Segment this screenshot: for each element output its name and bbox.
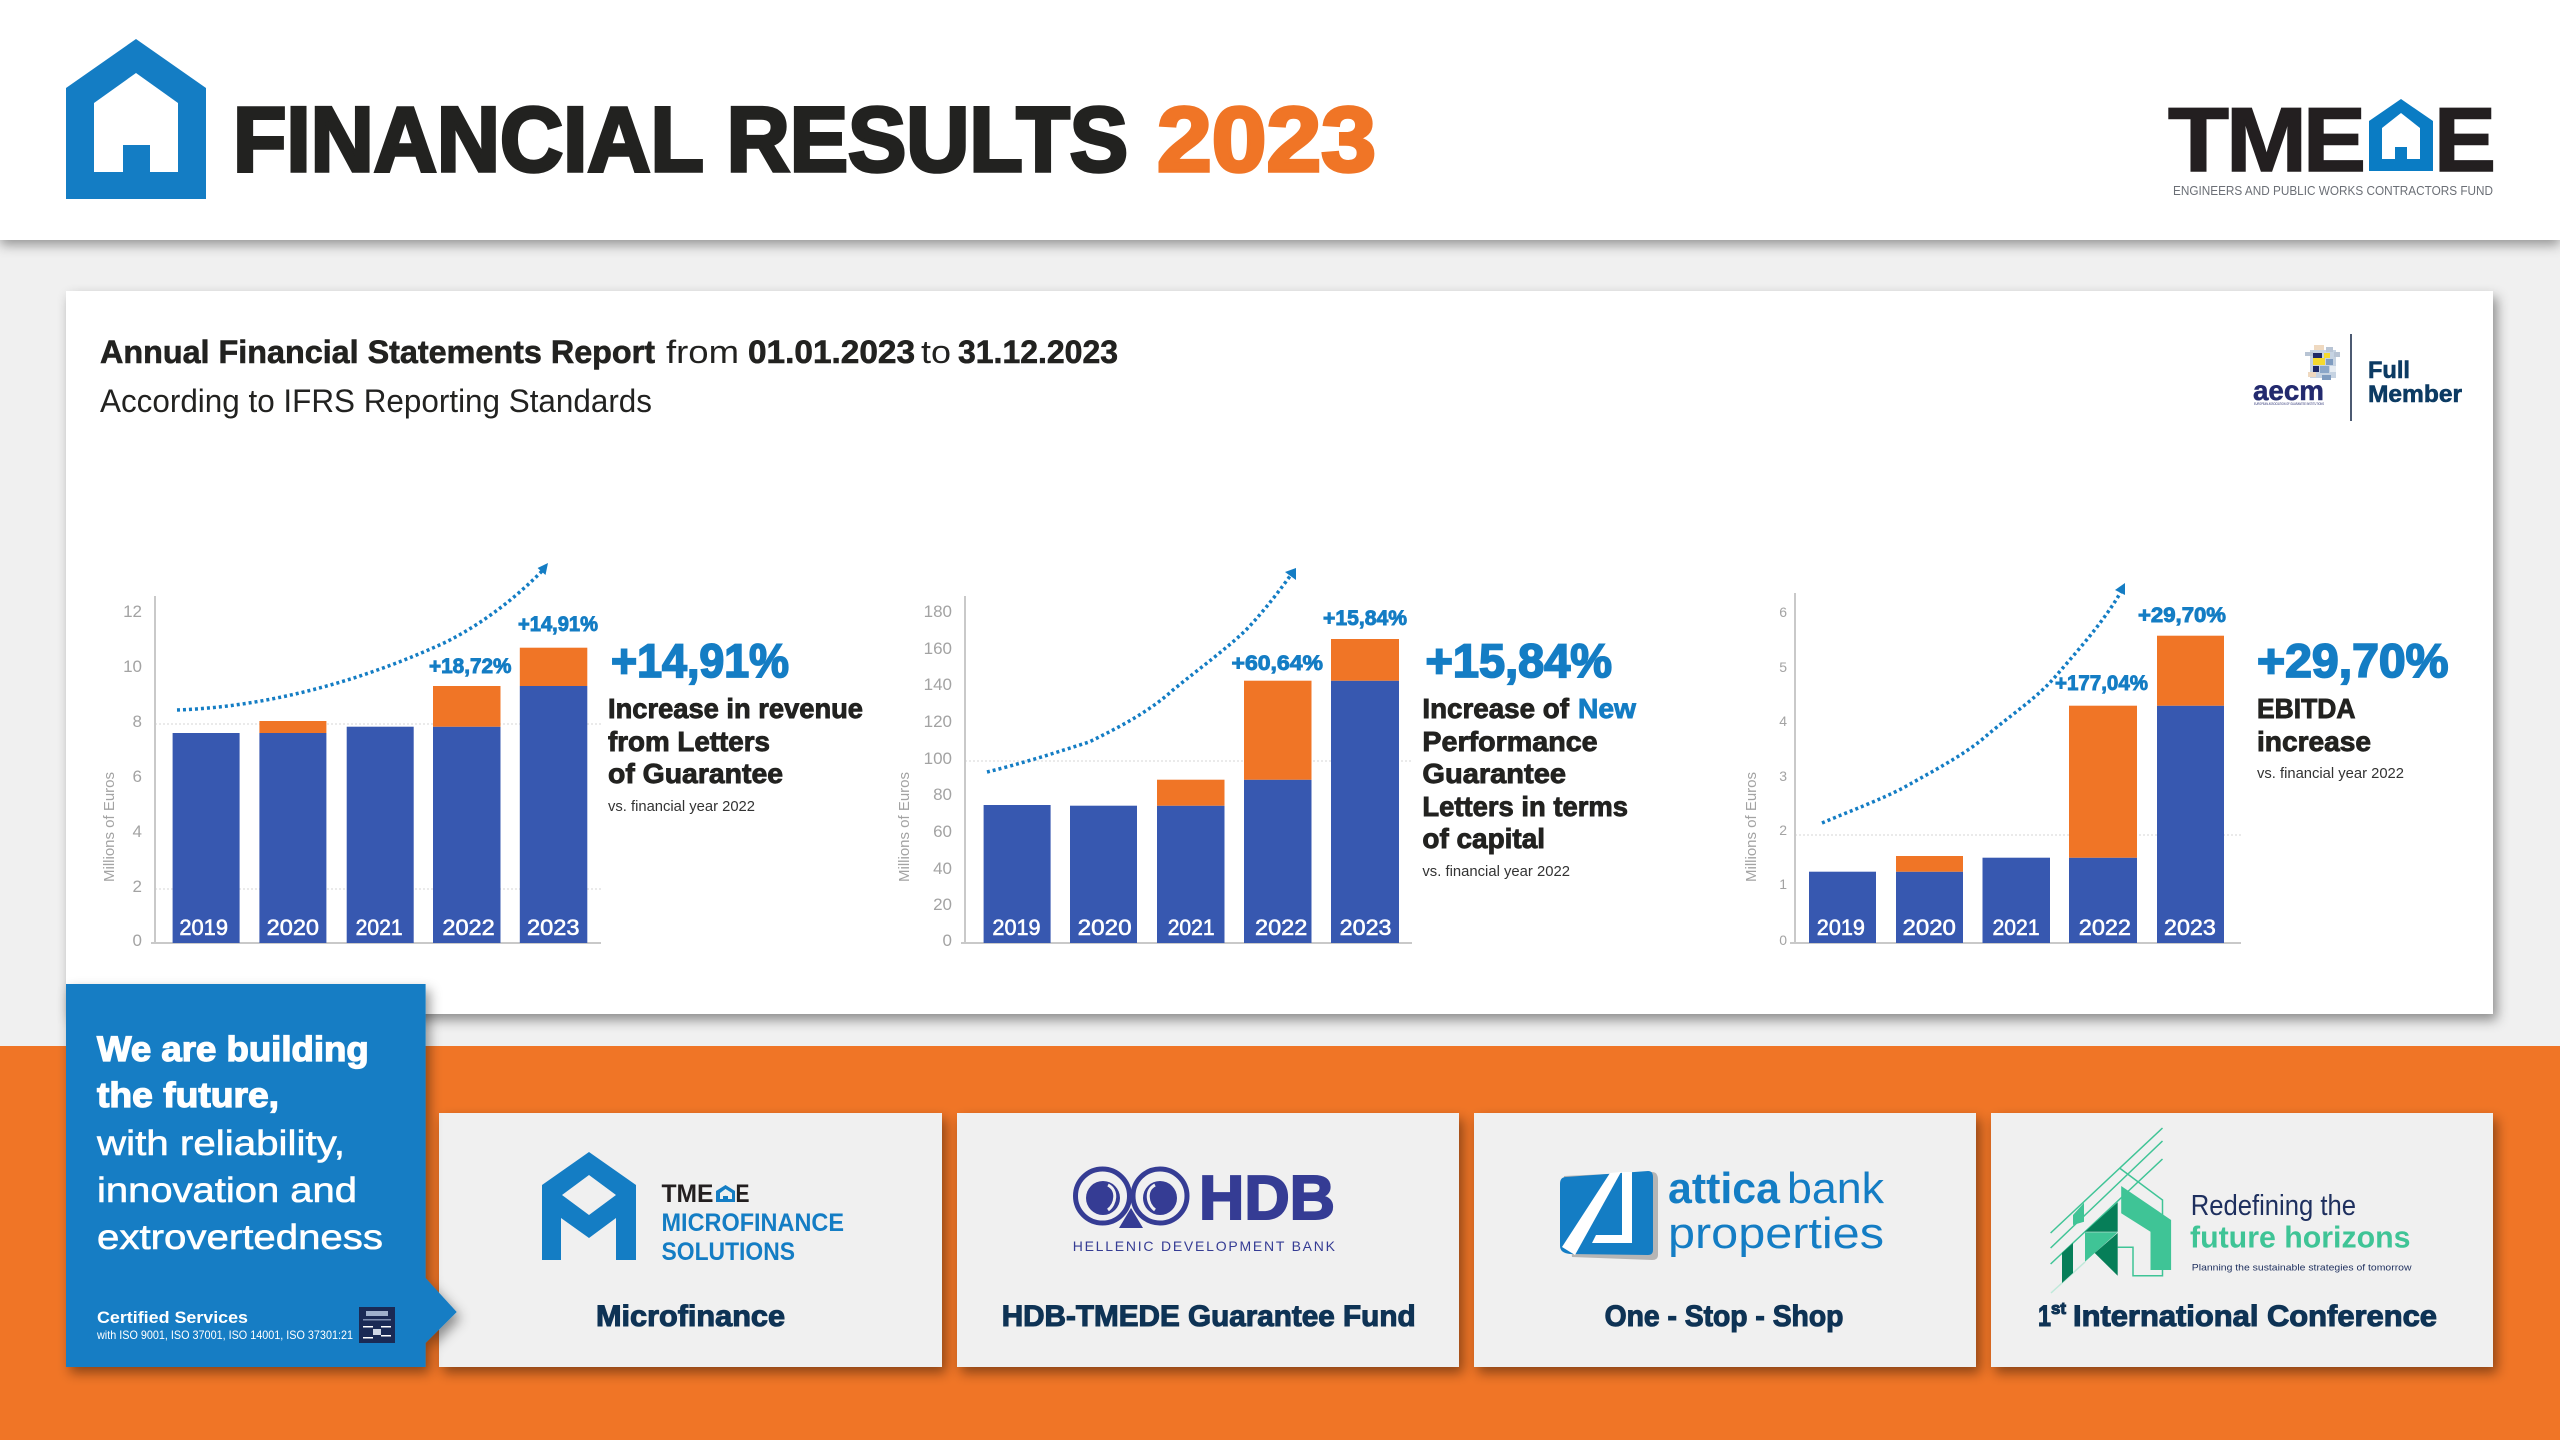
panel: annual statements	[66, 291, 2493, 1014]
card label: One - Stop - Shop	[1605, 1300, 1843, 1333]
y axis labels: 0	[133, 931, 142, 950]
y axis labels: 5	[1779, 659, 1787, 675]
y axis labels: 1	[1779, 876, 1787, 892]
year labels: 2023	[2164, 915, 2216, 940]
year labels: 2020	[267, 915, 319, 940]
card: attica bank properties	[1474, 1113, 1976, 1367]
callout: performance letters: +15,84%	[1426, 634, 1612, 687]
icon: ISO badge	[359, 1307, 395, 1343]
chart: revenue	[101, 563, 863, 950]
icon: conference house logo	[2051, 1128, 2171, 1293]
TMEDE logo: M	[2226, 90, 2307, 191]
header bar	[0, 0, 2560, 240]
bars	[984, 639, 1399, 943]
percentage labels	[429, 613, 598, 678]
AECM full member badge: EUROPEAN ASSOCIATION OF GUARANTEE INSTITUTIONS	[2254, 401, 2324, 406]
y axis labels: 4	[1779, 713, 1787, 729]
HDB wordmark	[1073, 1164, 1336, 1254]
y axis labels: 8	[133, 712, 142, 731]
callout: performance letters	[1422, 634, 1636, 880]
attica wordmark: bank	[1787, 1164, 1885, 1213]
callout: EBITDA: vs. financial year 2022	[2257, 765, 2404, 782]
card: conference	[1991, 1113, 2493, 1367]
y axis labels: 140	[924, 675, 952, 694]
y axis title: Millions of Euros	[101, 772, 118, 882]
callout: EBITDA: EBITDA	[2257, 693, 2356, 724]
AECM full member badge	[2253, 334, 2462, 421]
year labels: 2020	[1078, 915, 1132, 940]
mission text: innovation and	[97, 1171, 357, 1210]
TMEDE logo: E	[2434, 90, 2496, 191]
y axis labels: 10	[123, 657, 142, 676]
mission text: the future,	[97, 1076, 279, 1115]
callout: revenue: vs. financial year 2022	[608, 798, 755, 815]
percentage labels: +60,64%	[1232, 652, 1323, 675]
callout: revenue: Increase in revenue	[608, 693, 863, 724]
attica wordmark: properties	[1668, 1209, 1884, 1258]
percentage labels: +15,84%	[1323, 607, 1407, 630]
arrow: growth trend	[1822, 583, 2125, 823]
card label: 1	[2038, 1300, 2051, 1333]
heading	[100, 334, 1118, 419]
callout: EBITDA: +29,70%	[2257, 634, 2448, 687]
card label: HDB-TMEDE Guarantee Fund	[1002, 1300, 1416, 1333]
microfinance wordmark: TME	[662, 1180, 714, 1208]
callout: performance letters: Increase of	[1422, 693, 1570, 724]
y axis labels: 20	[933, 895, 952, 914]
percentage labels: +18,72%	[429, 655, 512, 678]
certified services: with ISO 9001, ISO 37001, ISO 14001, ISO 37301:21	[96, 1328, 353, 1342]
callout: performance letters: of capital	[1422, 823, 1545, 854]
callout: EBITDA: increase	[2257, 726, 2371, 757]
certified services: Certified Services	[97, 1308, 248, 1327]
orange footer band	[0, 1046, 2560, 1440]
card label: International Conference	[2073, 1300, 2437, 1333]
y axis labels: 4	[133, 822, 142, 841]
conference wordmark: future horizons	[2190, 1220, 2410, 1255]
mission text: We are building	[97, 1030, 369, 1069]
year labels: 2020	[1902, 915, 1956, 940]
chart: EBITDA	[1743, 583, 2448, 948]
AECM full member badge: Member	[2368, 381, 2462, 408]
callout: revenue: from Letters	[608, 726, 770, 757]
title: 2023	[1157, 89, 1376, 191]
chart: performance guarantee letters	[896, 568, 1636, 950]
microfinance wordmark	[662, 1180, 844, 1266]
y axis labels: 160	[924, 639, 952, 658]
mission text: with reliability,	[96, 1124, 345, 1163]
year labels	[1817, 915, 2216, 940]
card: microfinance	[439, 1113, 942, 1367]
callout: performance letters: Guarantee	[1422, 758, 1566, 789]
certified services	[96, 1308, 353, 1342]
card label: st	[2051, 1299, 2066, 1318]
callout: revenue: of Guarantee	[608, 758, 783, 789]
year labels: 2021	[356, 915, 403, 940]
HDB wordmark: HDB	[1199, 1164, 1335, 1233]
HDB wordmark: HELLENIC DEVELOPMENT BANK	[1073, 1238, 1336, 1254]
year labels: 2023	[527, 915, 580, 940]
heading: 31.12.2023	[958, 334, 1118, 370]
callout: revenue: +14,91%	[611, 634, 789, 687]
TMEDE logo: E	[2303, 90, 2366, 191]
y axis labels	[924, 602, 952, 950]
year labels: 2022	[1255, 915, 1307, 940]
AECM full member badge: Full	[2368, 357, 2410, 384]
year labels: 2023	[1340, 915, 1392, 940]
y axis title: Millions of Euros	[1743, 772, 1760, 882]
percentage labels	[1232, 607, 1407, 675]
AECM full member badge: aecm	[2253, 375, 2324, 406]
icon: HDB owl logo	[1076, 1169, 1187, 1228]
heading: According to IFRS Reporting Standards	[100, 383, 652, 419]
callout: EBITDA	[2257, 634, 2448, 782]
year labels: 2022	[442, 915, 495, 940]
microfinance wordmark: MICROFINANCE	[662, 1209, 844, 1237]
card label: Microfinance	[596, 1300, 785, 1333]
panel: blue mission statement	[66, 984, 457, 1367]
y axis labels: 40	[933, 859, 952, 878]
TMEDE logo: T	[2168, 90, 2229, 191]
microfinance wordmark: E	[736, 1180, 750, 1208]
y axis labels: 0	[1779, 932, 1787, 948]
y axis labels: 60	[933, 822, 952, 841]
y axis labels: 2	[1779, 822, 1787, 838]
percentage labels: +29,70%	[2138, 604, 2226, 627]
title: FINANCIAL RESULTS	[233, 89, 1128, 191]
microfinance wordmark: SOLUTIONS	[662, 1238, 795, 1266]
y axis labels: 6	[133, 767, 142, 786]
y axis labels	[123, 602, 142, 950]
year labels: 2022	[2079, 915, 2131, 940]
arrow: growth trend	[177, 563, 548, 710]
heading: from	[666, 334, 739, 370]
year labels	[992, 915, 1392, 940]
conference wordmark	[2190, 1190, 2412, 1274]
y axis labels: 2	[133, 877, 142, 896]
mission text: extrovertedness	[97, 1218, 383, 1257]
percentage labels: +14,91%	[518, 613, 598, 636]
icon: house logo	[66, 39, 206, 199]
TMEDE logo: ENGINEERS AND PUBLIC WORKS CONTRACTORS FUND	[2173, 183, 2493, 198]
heading: 01.01.2023	[748, 334, 915, 370]
heading: Annual Financial Statements Report	[100, 334, 655, 370]
arrow: growth trend	[987, 568, 1296, 772]
mission text	[96, 1030, 383, 1257]
percentage labels: +177,04%	[2055, 672, 2148, 695]
year labels: 2019	[1817, 915, 1865, 940]
y axis labels: 6	[1779, 604, 1787, 620]
y axis labels: 120	[924, 712, 952, 731]
year labels	[179, 915, 580, 940]
y axis labels: 0	[943, 931, 952, 950]
y axis labels	[1779, 604, 1787, 948]
callout: revenue	[608, 634, 863, 815]
icon: microfinance logo	[542, 1152, 636, 1260]
y axis labels: 100	[924, 749, 952, 768]
y axis labels: 180	[924, 602, 952, 621]
year labels: 2019	[179, 915, 228, 940]
y axis labels: 80	[933, 785, 952, 804]
callout: performance letters: Performance	[1422, 726, 1598, 757]
callout: performance letters: vs. financial year 2022	[1422, 863, 1570, 880]
callout: performance letters: Letters in terms	[1422, 791, 1628, 822]
attica wordmark: attica	[1668, 1164, 1781, 1213]
y axis title: Millions of Euros	[896, 772, 913, 882]
attica wordmark	[1668, 1164, 1885, 1258]
card: HDB	[957, 1113, 1459, 1367]
heading: to	[921, 334, 951, 370]
year labels: 2021	[1168, 915, 1215, 940]
year labels: 2021	[1992, 915, 2040, 940]
y axis labels: 3	[1779, 768, 1787, 784]
bars	[173, 648, 587, 943]
bars	[1809, 636, 2224, 943]
conference wordmark: Redefining the	[2191, 1190, 2356, 1222]
TMEDE logo	[2168, 90, 2496, 198]
percentage labels	[2055, 604, 2226, 695]
year labels: 2019	[992, 915, 1041, 940]
y axis labels: 12	[123, 602, 142, 621]
callout: performance letters: New	[1578, 693, 1636, 724]
conference wordmark: Planning the sustainable strategies of tomorrow	[2192, 1263, 2412, 1274]
icon: attica logo	[1560, 1171, 1658, 1260]
